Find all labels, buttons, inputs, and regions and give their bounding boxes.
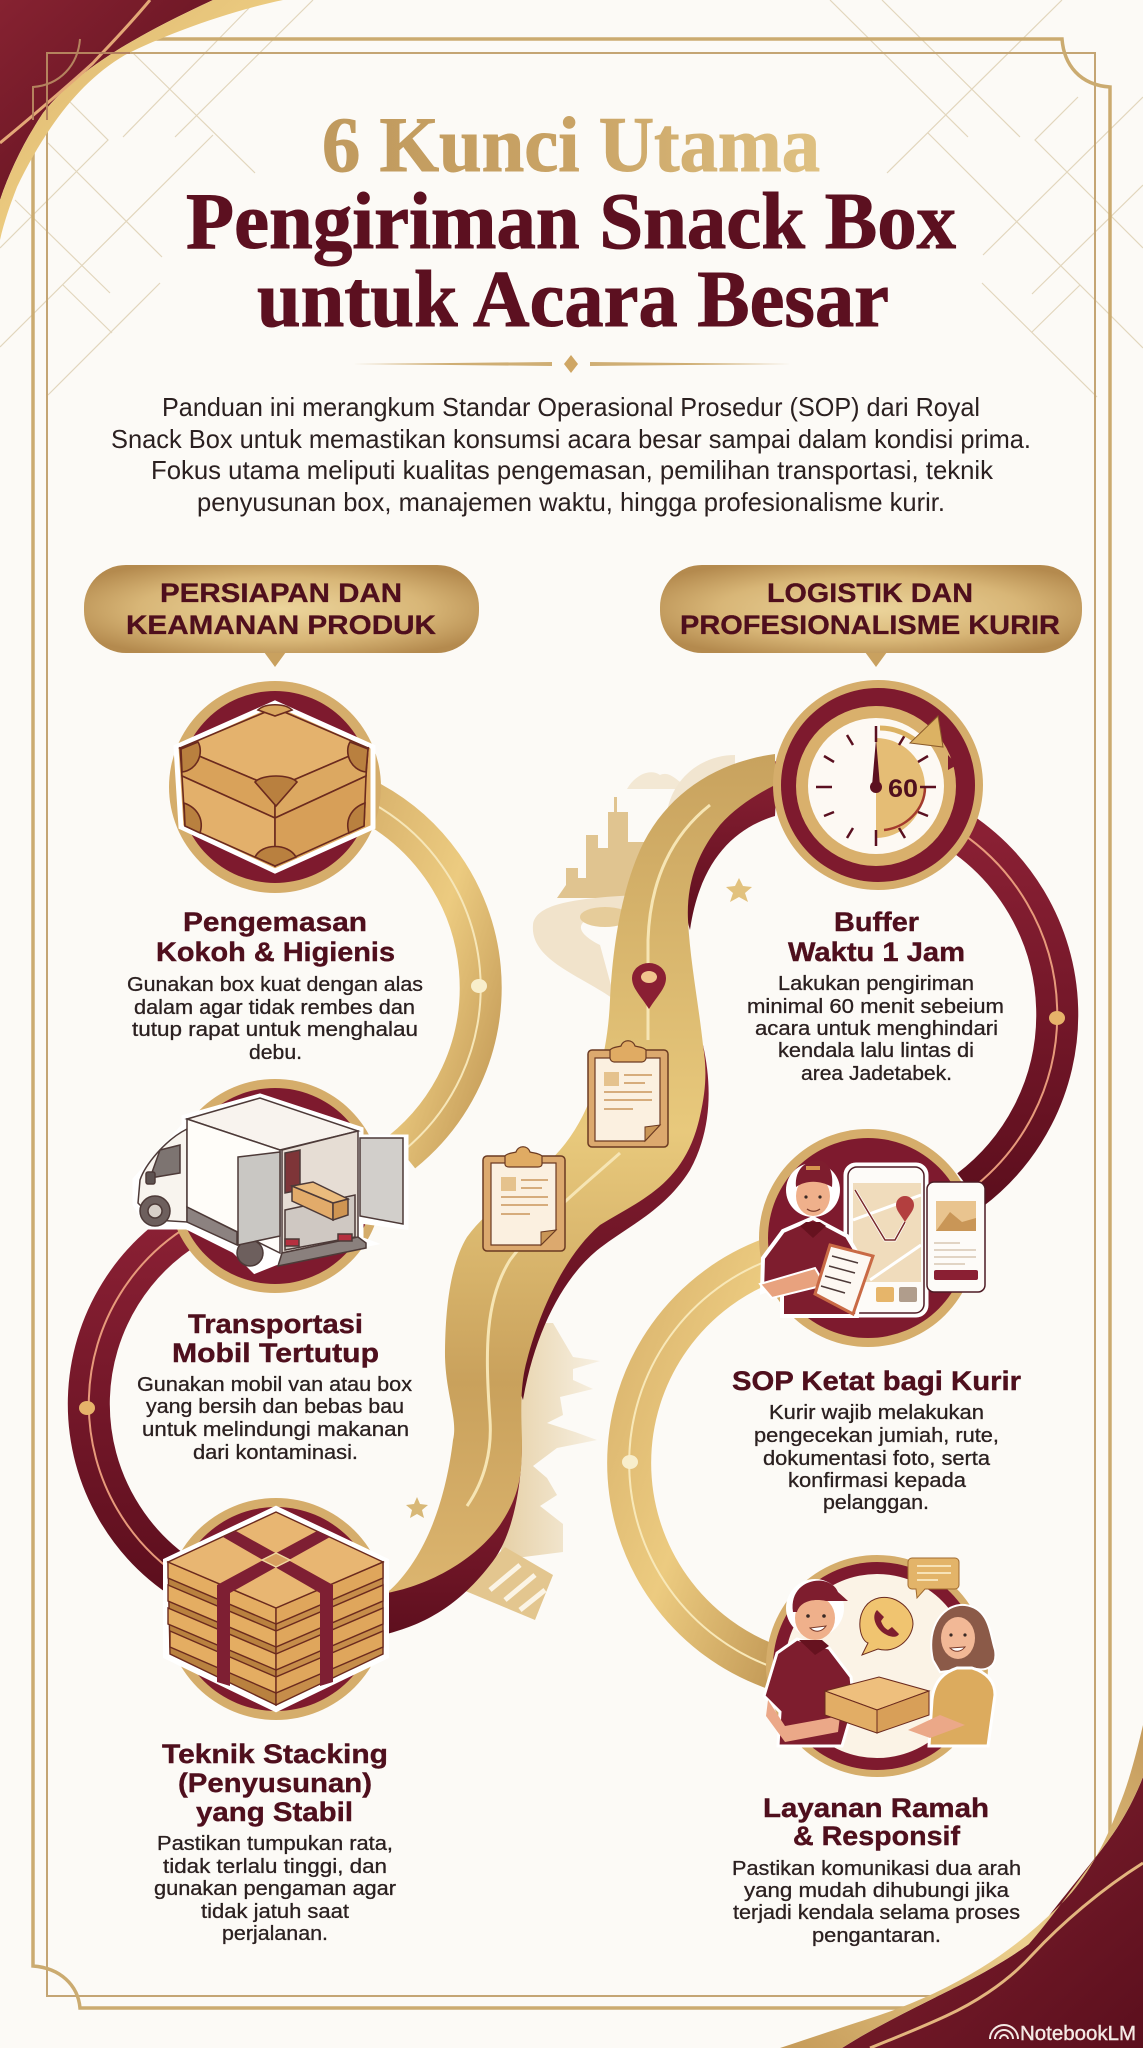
body text: Pastikan tumpukan rata,	[157, 1833, 393, 1855]
icon: courier with phones	[759, 1129, 985, 1347]
body text	[732, 1858, 1021, 1947]
connector arc: gold top left	[370, 802, 487, 1152]
body text	[127, 974, 423, 1064]
body text: dokumentasi foto, serta	[763, 1448, 991, 1470]
intro paragraph: Panduan ini merangkum Standar Operasional Prosedur (SOP) dari Royal	[162, 392, 980, 422]
connector arc: gold lower right	[622, 1258, 775, 1668]
section pill: left: KEAMANAN PRODUK	[126, 610, 437, 640]
title: 6 Kunci Utama	[322, 101, 820, 188]
icon: clock 60 minutes	[773, 680, 983, 890]
section pill: right	[660, 565, 1082, 667]
intro paragraph: penyusunan box, manajemen waktu, hingga profesionalisme kurir.	[197, 487, 945, 517]
heading: (Penyusunan)	[178, 1768, 372, 1798]
body text: Kurir wajib melakukan	[769, 1402, 984, 1424]
body text: dari kontaminasi.	[193, 1442, 358, 1464]
panel: sop kurir	[732, 1129, 1022, 1514]
body text: Gunakan box kuat dengan alas	[127, 974, 423, 996]
heading	[763, 1793, 989, 1851]
intro paragraph: Fokus utama meliputi kualitas pengemasan, pemilihan transportasi, teknik	[151, 455, 994, 485]
body text: tutup rapat untuk menghalau	[132, 1019, 418, 1041]
body text: area Jadetabek.	[801, 1063, 952, 1085]
icon: stacked boxes	[165, 1498, 387, 1720]
notebooklm watermark: NotebookLM	[1020, 2023, 1136, 2045]
intro paragraph	[111, 392, 1031, 517]
body text	[137, 1374, 412, 1464]
connector arc: maroon right	[960, 832, 1065, 1190]
panel: pengemasan	[127, 681, 423, 1064]
icon: clipboard upper	[588, 1041, 668, 1147]
heading: yang Stabil	[196, 1797, 353, 1827]
body text: pengantaran.	[812, 1925, 941, 1947]
heading	[788, 907, 965, 967]
corner swoosh: top left	[0, 0, 283, 240]
body text: Lakukan pengiriman	[778, 973, 974, 995]
background city skyline: top	[533, 755, 735, 1000]
body text: konfirmasi kepada	[788, 1470, 967, 1492]
heading	[172, 1309, 379, 1368]
panel: transportasi	[136, 1079, 412, 1464]
panel: buffer waktu	[747, 680, 1004, 1085]
background city skyline: bottom	[463, 1323, 600, 1620]
connector arc: maroon left	[79, 1225, 190, 1580]
heading: Layanan Ramah	[763, 1793, 989, 1823]
heading: Buffer	[834, 907, 920, 937]
title	[186, 101, 956, 344]
body text: perjalanan.	[222, 1923, 328, 1945]
body text: tidak terlalu tinggi, dan	[163, 1856, 387, 1878]
section pill: right: LOGISTIK DAN	[767, 578, 973, 608]
body text	[747, 973, 1004, 1085]
body text: untuk melindungi makanan	[142, 1419, 409, 1441]
icon: star lower	[406, 1497, 428, 1518]
icon: clipboard lower	[483, 1147, 565, 1251]
body text: yang bersih dan bebas bau	[146, 1396, 404, 1418]
icon: clock 60 minutes: 60	[888, 775, 918, 803]
heading: Waktu 1 Jam	[788, 937, 965, 967]
body text: pelanggan.	[823, 1492, 929, 1514]
panel: stacking	[154, 1498, 396, 1945]
heading: Teknik Stacking	[162, 1739, 388, 1769]
heading: Mobil Tertutup	[172, 1338, 379, 1368]
panel: layanan ramah	[732, 1555, 1021, 1947]
body text: Gunakan mobil van atau box	[137, 1374, 412, 1396]
heading: & Responsif	[793, 1821, 961, 1851]
intro paragraph: Snack Box untuk memastikan konsumsi acara besar sampai dalam kondisi prima.	[111, 424, 1031, 454]
body text: acara untuk menghindari	[755, 1018, 998, 1040]
heading: Kokoh & Higienis	[156, 937, 395, 967]
body text	[754, 1402, 999, 1514]
heading: SOP Ketat bagi Kurir	[732, 1366, 1022, 1396]
title divider	[353, 355, 791, 373]
icon: location pin	[632, 963, 666, 1009]
central winding road	[387, 754, 778, 1634]
body text: gunakan pengaman agar	[154, 1878, 396, 1900]
heading	[156, 907, 395, 967]
heading: Pengemasan	[183, 907, 367, 937]
body text: pengecekan jumiah, rute,	[754, 1425, 999, 1447]
section pill: right: PROFESIONALISME KURIR	[680, 610, 1060, 640]
section pill: left	[84, 565, 479, 667]
body text: terjadi kendala selama proses	[733, 1902, 1020, 1924]
icon: courier handing box to customer	[764, 1555, 995, 1777]
body text: dalam agar tidak rembes dan	[134, 997, 415, 1019]
corner swoosh: bottom right	[780, 1725, 1143, 2048]
body text: Pastikan komunikasi dua arah	[732, 1858, 1021, 1880]
heading: Transportasi	[188, 1309, 363, 1339]
section pill: left: PERSIAPAN DAN	[160, 578, 402, 608]
heading	[162, 1739, 388, 1827]
icon: delivery van	[136, 1079, 405, 1293]
title: untuk Acara Besar	[257, 256, 889, 344]
body text	[154, 1833, 396, 1945]
body text: debu.	[249, 1042, 302, 1064]
body text: tidak jatuh saat	[201, 1901, 349, 1923]
body text: minimal 60 menit sebeium	[747, 996, 1004, 1018]
title: Pengiriman Snack Box	[186, 178, 956, 266]
body text: yang mudah dihubungi jika	[744, 1880, 1010, 1902]
icon: sturdy box	[169, 681, 381, 893]
body text: kendala lalu lintas di	[778, 1040, 974, 1062]
icon: star upper	[726, 878, 752, 902]
